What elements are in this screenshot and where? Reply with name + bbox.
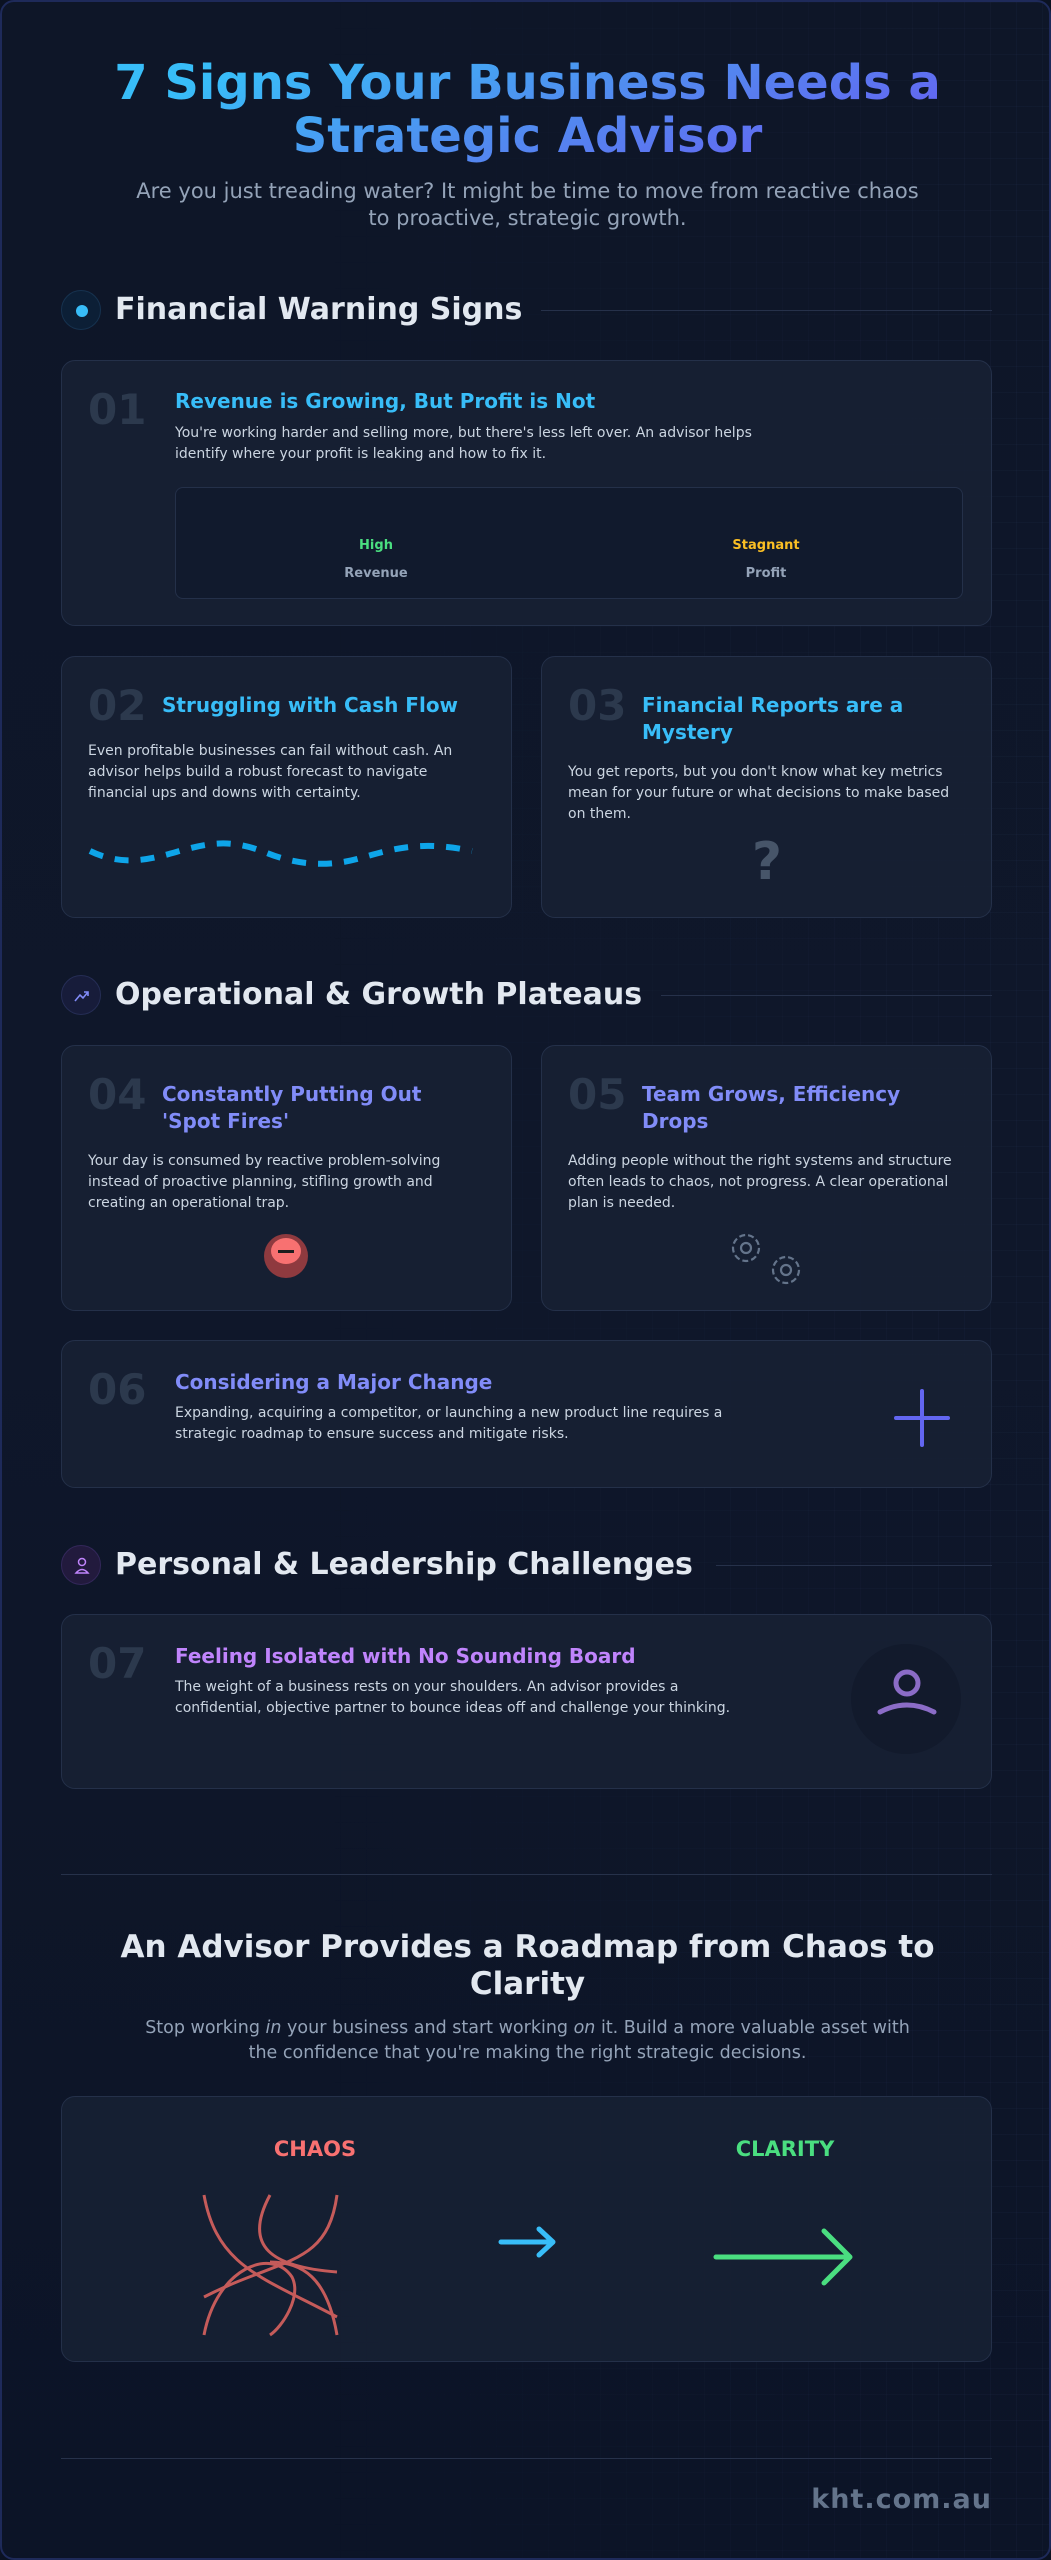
card 07: 07 [88,1639,146,1688]
card 01 [61,360,992,626]
card 07 [61,1614,992,1789]
heading: roadmap: An Advisor Provides a Roadmap from Chaos to [120,1929,935,1965]
subtitle: Are you just treading water? It might be time to move from reactive chaos [136,179,919,203]
title 06: Considering a Major Change [175,1370,492,1394]
card 02 [61,656,512,918]
wave chart [88,840,473,867]
text: roadmap: the confidence that you're making the right strategic decisions. [249,2043,806,2063]
card 04: 04 [88,1070,146,1119]
text 02 [88,743,452,801]
text 02: financial ups and downs with certainty. [88,785,361,801]
card 06 [61,1340,992,1488]
title 04: 'Spot Fires' [162,1109,289,1133]
arrow: blue [498,2226,556,2258]
text 07: The weight of a business rests on your shoulders. An advisor provides a [175,1679,678,1695]
text 06: Expanding, acquiring a competitor, or launching a new product line requires a [175,1405,722,1421]
card 01: 01 [88,385,146,434]
text 05: Adding people without the right systems and structure [568,1153,952,1169]
chart box: Stagnant [732,538,800,553]
section header: financial: Financial Warning Signs [115,292,522,327]
text 06: strategic roadmap to ensure success and mitigate risks. [175,1426,569,1442]
heading: roadmap: Clarity [470,1966,585,2002]
section header: personal [61,1545,992,1585]
footer brand: kht.com.au [811,2484,992,2515]
title 05: Drops [642,1109,708,1133]
text 06 [175,1405,722,1442]
arrow: green [714,2228,852,2286]
chart box [175,487,963,599]
title 05: Team Grows, Efficiency [642,1082,900,1106]
card 06: 06 [88,1365,146,1414]
text 04: instead of proactive planning, stifling growth and [88,1174,433,1190]
chart box: Revenue [344,566,408,581]
icon: person [61,1545,101,1585]
label chaos: CHAOS [274,2137,356,2161]
panel: chaos to clarity [61,2096,992,2362]
text 02: Even profitable businesses can fail without cash. An [88,743,452,759]
text 01: You're working harder and selling more, but there's less left over. An advisor helps [175,425,752,441]
title 04 [162,1082,421,1133]
text 04 [88,1153,440,1211]
subtitle: to proactive, strategic growth. [368,206,687,230]
icon: plus [894,1389,950,1447]
text: roadmap [145,2018,910,2063]
icon: tangled lines [202,2194,338,2336]
label clarity: CLARITY [736,2137,834,2161]
title 03 [642,693,903,744]
icon: trend [61,975,101,1015]
text: roadmap: Stop working in your business and start working on it. Build a more valuable asset with [145,2018,910,2038]
text 07: confidential, objective partner to bounce ideas off and challenge your thinking. [175,1700,730,1716]
section header: financial [61,290,992,330]
text 03 [568,764,949,822]
title 05 [642,1082,900,1133]
title: 7 Signs Your Business Needs a [114,55,941,111]
text 03: on them. [568,806,631,822]
icon: gears [732,1234,800,1284]
section header: personal: Personal & Leadership Challenges [115,1547,693,1582]
title 01: Revenue is Growing, But Profit is Not [175,389,595,413]
card 04 [61,1045,512,1311]
text 02: advisor helps build a robust forecast to navigate [88,764,427,780]
text 05 [568,1153,952,1211]
icon: avatar [878,1670,936,1714]
title 04: Constantly Putting Out [162,1082,421,1106]
text 07 [174,1679,730,1716]
heading: roadmap [120,1929,935,2002]
chart box: High [359,538,393,553]
title 07: Feeling Isolated with No Sounding Board [175,1644,636,1668]
icon: financial [61,290,101,330]
subtitle [136,179,919,230]
section header: operational: Operational & Growth Plateaus [115,977,642,1012]
text 05: plan is needed. [568,1195,675,1211]
icon: stop [264,1234,308,1278]
text 01: identify where your profit is leaking and how to fix it. [175,446,546,462]
text 04: creating an operational trap. [88,1195,289,1211]
text 01 [175,425,752,462]
chart box: Profit [746,566,786,581]
title [2,57,1051,163]
title 03: Mystery [642,720,733,744]
title: Strategic Advisor [293,108,762,164]
title 03: Financial Reports are a [642,693,903,717]
text 03: mean for your future or what decisions to make based [568,785,949,801]
card 02: 02 [88,681,146,730]
section header: operational [61,975,992,1015]
card 03: 03 [568,681,626,730]
text 04: Your day is consumed by reactive problem-solving [88,1153,440,1169]
card 05 [541,1045,992,1311]
card 05: 05 [568,1070,626,1119]
title 02: Struggling with Cash Flow [162,693,458,717]
text 03: You get reports, but you don't know what key metrics [568,764,943,780]
text 05: often leads to chaos, not progress. A clear operational [568,1174,948,1190]
card 03 [541,656,992,918]
icon: question: ? [752,832,782,892]
